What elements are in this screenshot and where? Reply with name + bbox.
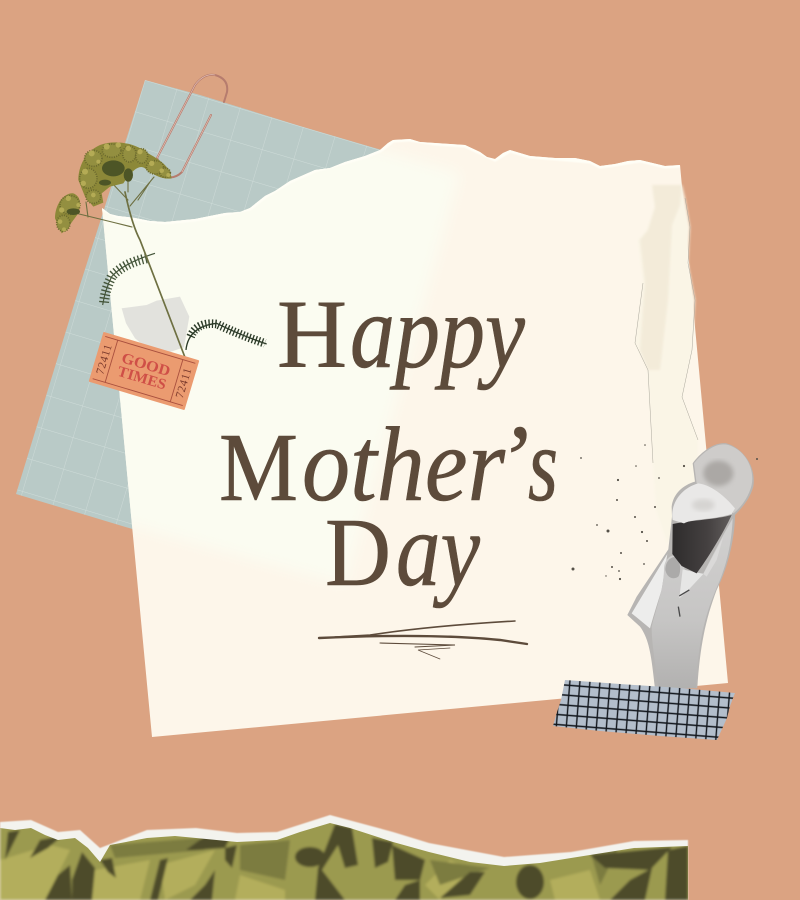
fern leaf: left	[103, 253, 155, 305]
panel: torn paper strip	[635, 185, 698, 543]
panel: cream torn sheet	[102, 139, 728, 737]
stems	[75, 173, 186, 360]
title	[219, 273, 558, 608]
icon: pressed yarrow plant	[55, 142, 267, 360]
lighter area where the blue sheet shows through	[102, 154, 370, 524]
title line: Day: ay	[396, 491, 481, 608]
checkered washi tape	[553, 680, 735, 740]
paper sleeve	[632, 554, 667, 628]
title line: Mother's: other	[302, 406, 506, 523]
cut-out halo	[627, 443, 754, 688]
ink speckles	[572, 444, 758, 580]
title line: Mother's: ’	[497, 406, 529, 513]
scribble underline	[319, 621, 527, 659]
hand	[652, 518, 733, 688]
title line: Day: D	[325, 499, 391, 606]
title line: Happy: appy	[350, 273, 526, 390]
mid leaf shapes	[110, 838, 620, 885]
cone	[672, 515, 732, 573]
icon: hand holding ice cream	[627, 443, 754, 688]
top scoop	[694, 444, 752, 513]
ticket number left: 72411	[94, 343, 115, 376]
icon: admission ticket	[89, 332, 199, 410]
lower scoop	[672, 483, 735, 523]
ticket text: GOOD	[119, 350, 172, 380]
fern leaf: right	[186, 323, 267, 350]
flower silhouettes	[78, 142, 172, 207]
title line: Mother's: s	[528, 406, 558, 523]
ticket number right: 72411	[174, 366, 194, 400]
panel: torn floral paper strip	[0, 810, 690, 900]
title line: Happy: H	[277, 281, 347, 388]
light leaf shapes	[0, 845, 600, 900]
dark leaf shapes	[5, 824, 688, 900]
ticket text: TIMES	[115, 364, 168, 393]
icon: paper clip	[157, 75, 227, 177]
title line: Mother's: M	[219, 414, 298, 521]
torn translucent tape	[122, 297, 189, 357]
panel: blue grid paper	[16, 80, 460, 590]
flower heads	[55, 142, 172, 233]
